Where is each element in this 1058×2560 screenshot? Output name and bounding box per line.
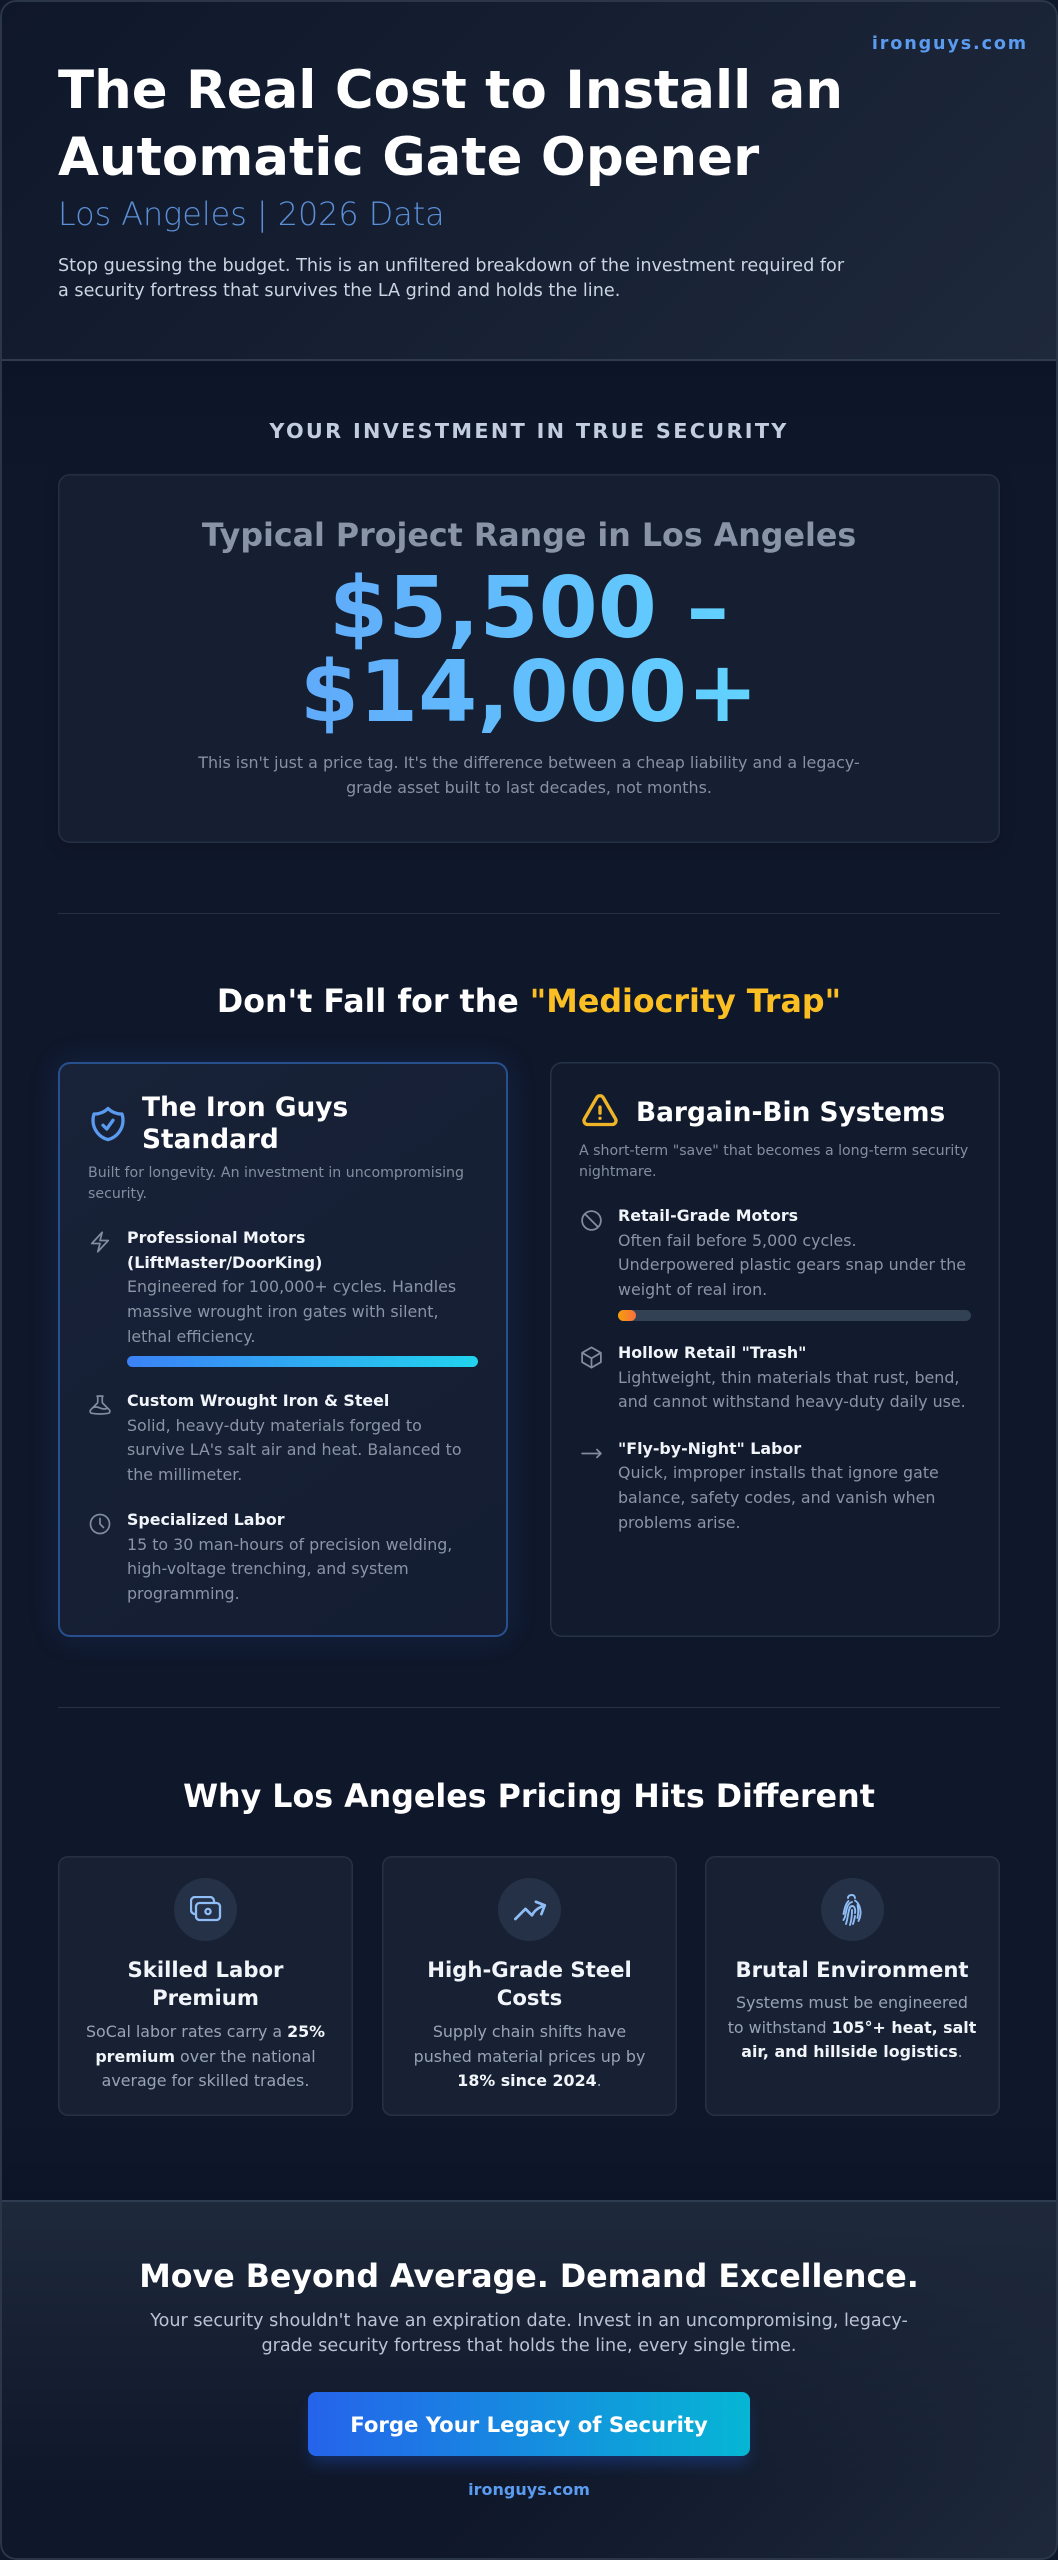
panel: the iron guys standard [58,1062,508,1637]
item: hollow retail trash: Hollow Retail "Trash" [618,1343,806,1362]
item: custom wrought iron: Custom Wrought Iron & Steel [127,1391,389,1410]
card text: SoCal labor rates carry a 25% [86,2022,325,2041]
card text: average for skilled trades. [102,2071,309,2090]
card heading: Standard [142,1124,279,1155]
item: professional motors [90,1228,478,1367]
card description [579,1143,968,1180]
item: fly-by-night labor [581,1438,939,1532]
item: professional motors: Professional Motors [127,1228,305,1247]
card description: security. [88,1186,147,1202]
call to action button [308,2392,750,2456]
card title: High-Grade Steel [427,1957,632,1982]
call to action button: Forge Your Legacy of Security [350,2412,708,2437]
card description: nightmare. [579,1164,657,1180]
brand link bottom: ironguys.com [468,2480,590,2499]
icon: bolt [90,1231,109,1253]
card title: Premium [152,1985,259,2010]
card text [414,2022,645,2090]
card text: Systems must be engineered [736,1993,968,2012]
card title: Brutal Environment [735,1957,969,1982]
card text: air, and hillside logistics. [741,2042,963,2061]
section heading: investment: YOUR INVESTMENT IN TRUE SECURITY [269,419,789,443]
item: professional motors: (LiftMaster/DoorKing) [127,1253,322,1272]
panel: brutal environment [704,1856,1000,2116]
price figure: $14,000+ [300,643,758,742]
item: professional motors: massive wrought iron gates with silent, [127,1302,439,1321]
icon: beaker [89,1395,111,1415]
icon: arrow right [581,1448,602,1458]
icon: box [581,1346,602,1369]
item: retail-grade motors: Often fail before 5,000 cycles. [618,1231,857,1250]
icon: warning triangle [582,1094,618,1126]
item: custom wrought iron: survive LA's salt air and heat. Balanced to [127,1440,462,1459]
card text [728,1993,976,2061]
header panel [0,0,1058,361]
footer heading: Move Beyond Average. Demand Excellence. [139,2259,919,2295]
brand link top right: ironguys.com [872,34,1028,54]
icon: shield check [91,1106,125,1142]
card text [86,2022,325,2090]
icon: ban [581,1210,602,1231]
card text: premium over the national [95,2047,316,2066]
item: specialized labor: Specialized Labor [127,1510,285,1529]
title [58,60,843,188]
price label: Typical Project Range in Los Angeles [202,518,856,554]
item: specialized labor: high-voltage trenching, and system [127,1559,409,1578]
footer panel [0,2200,1058,2560]
intro text: a security fortress that survives the LA grind and holds the line. [58,281,620,301]
item: specialized labor: 15 to 30 man-hours of precision welding, [127,1535,452,1554]
card title [427,1957,632,2010]
price note: grade asset built to last decades, not months. [346,778,712,797]
subtitle: Los Angeles | 2026 Data [58,196,445,233]
card title: Skilled Labor [127,1957,284,1982]
icon: trending up [498,1878,561,1941]
card description: A short-term "save" that becomes a long-term security [579,1143,968,1159]
divider [58,1707,1000,1708]
item: fly-by-night labor: problems arise. [618,1513,741,1532]
item: hollow retail trash: Lightweight, thin materials that rust, bend, [618,1368,959,1387]
icon: fingerprint [820,1878,884,1941]
panel: price range [58,474,1000,843]
item: fly-by-night labor: Quick, improper installs that ignore gate [618,1463,939,1482]
title: The Real Cost to Install an [58,60,843,121]
item: specialized labor [90,1510,452,1603]
item: fly-by-night labor: "Fly-by-Night" Labor [618,1438,801,1458]
card title: Costs [497,1985,562,2010]
price note [198,753,860,797]
card heading: Bargain-Bin Systems [636,1096,945,1128]
item: custom wrought iron: Solid, heavy-duty materials forged to [127,1416,422,1435]
item: retail-grade motors [581,1206,971,1321]
bar: motor lifespan full [127,1356,478,1367]
icon: clock [90,1514,110,1534]
card heading: The Iron Guys [142,1092,348,1123]
footer text: Your security shouldn't have an expiration date. Invest in an uncompromising, legacy- [150,2311,908,2331]
divider [58,913,1000,914]
item: retail-grade motors: weight of real iron. [618,1280,767,1299]
item: professional motors: Engineered for 100,000+ cycles. Handles [127,1277,456,1296]
bar: motor lifespan short [618,1310,971,1321]
icon: banknotes [174,1878,237,1941]
item: professional motors: lethal efficiency. [127,1327,255,1346]
heading: mediocrity trap: Don't Fall for the "Mediocrity Trap" [217,984,841,1020]
item: custom wrought iron [89,1391,462,1484]
card heading [142,1092,348,1155]
intro text: Stop guessing the budget. This is an unfiltered breakdown of the investment required for [58,256,844,276]
item: specialized labor: programming. [127,1584,240,1603]
card text: to withstand 105°+ heat, salt [728,2018,976,2037]
title: Automatic Gate Opener [58,127,759,188]
panel: skilled labor premium [58,1856,353,2116]
item: hollow retail trash: and cannot withstand heavy-duty daily use. [618,1392,966,1411]
card description [88,1165,464,1202]
card text: Supply chain shifts have [433,2022,626,2041]
price figure [58,567,1000,735]
item: hollow retail trash [581,1343,966,1411]
card text: pushed material prices up by [414,2047,645,2066]
heading: why LA pricing: Why Los Angeles Pricing Hits Different [183,1779,875,1815]
item: custom wrought iron: the millimeter. [127,1465,242,1484]
card description: Built for longevity. An investment in uncompromising [88,1165,464,1181]
price figure: $5,500 – [329,559,729,658]
item: retail-grade motors: Retail-Grade Motors [618,1206,798,1225]
footer text [150,2311,908,2356]
price note: This isn't just a price tag. It's the difference between a cheap liability and a legacy- [198,753,860,772]
card title [127,1957,284,2010]
intro text [58,256,844,301]
panel: high-grade steel costs [382,1856,677,2116]
card text: 18% since 2024. [457,2071,602,2090]
item: retail-grade motors: Underpowered plastic gears snap under the [618,1255,966,1274]
panel: bargain-bin systems [550,1062,1000,1637]
item: fly-by-night labor: balance, safety codes, and vanish when [618,1488,935,1507]
footer text: grade security fortress that holds the line, every single time. [261,2336,797,2356]
